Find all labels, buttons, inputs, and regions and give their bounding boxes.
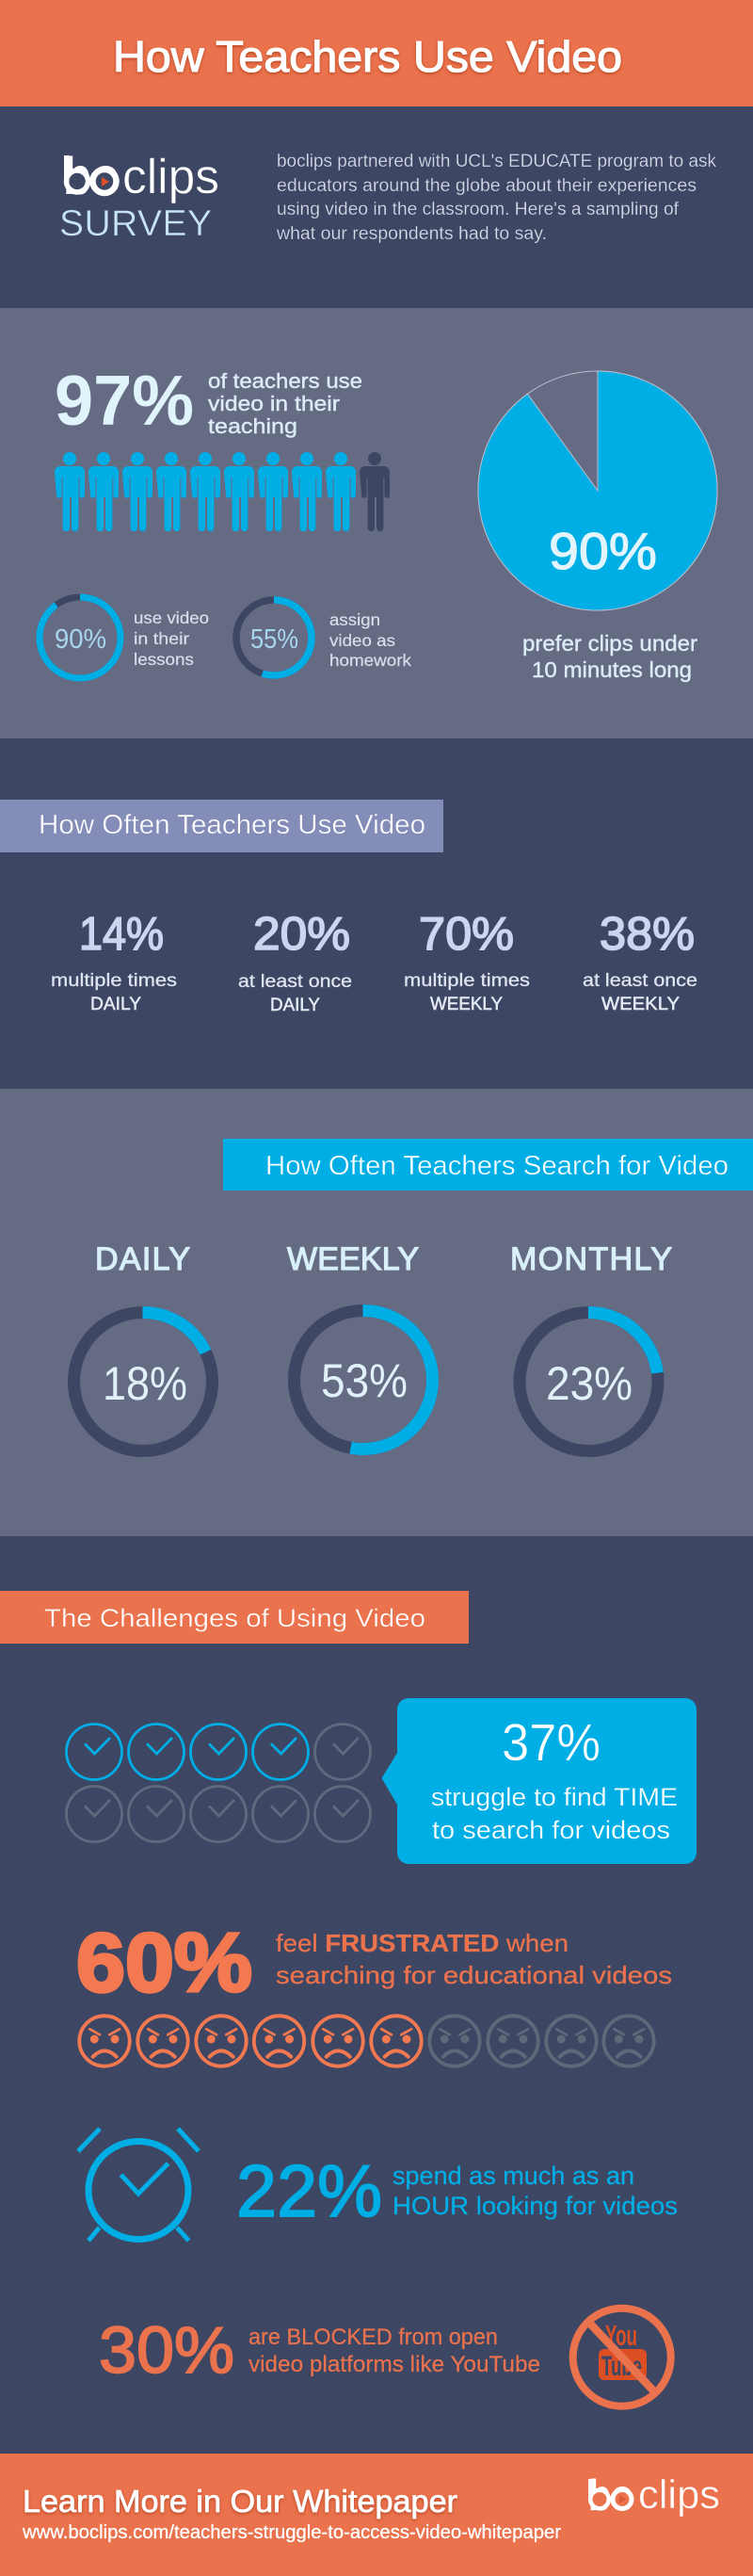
stat: 20 percent at least once daily: 20% <box>253 909 350 960</box>
section banner: How Often Teachers Use Video <box>39 810 425 840</box>
donut: 55 percent assign video: 55% <box>250 624 298 655</box>
stat: 20 percent at least once daily <box>238 909 352 1015</box>
section banner <box>223 1139 753 1191</box>
intro text: educators around the globe about their experiences <box>277 176 697 196</box>
footer url: www.boclips.com/teachers-struggle-to-access-video-whitepaper <box>22 2522 561 2543</box>
stat: 60 percent frustrated <box>76 1916 672 2009</box>
logo: boclips <box>588 2471 720 2519</box>
donut: 55 percent assign video <box>236 600 411 675</box>
stat: 22 percent one hour: spend as much as an <box>393 2162 634 2190</box>
donut: monthly 23 percent <box>510 1241 672 1450</box>
callout: 37 percent: struggle to find TIME <box>431 1783 678 1811</box>
donut: 90 percent use video: lessons <box>134 650 194 669</box>
icon grid: check marks <box>66 1724 371 1842</box>
pie chart: 90 percent prefer short clips: 90% <box>549 522 657 580</box>
stat: 38 percent at least once weekly: at least once <box>583 971 697 991</box>
footer heading: Learn More in Our Whitepaper <box>23 2484 457 2519</box>
logo: boclips survey: SURVEY <box>59 203 212 244</box>
donut: daily 18 percent <box>73 1241 213 1450</box>
stat: 38 percent at least once weekly: WEEKLY <box>601 995 680 1014</box>
donut: weekly 53 percent <box>287 1241 433 1449</box>
donut: 55 percent assign video: homework <box>329 651 411 670</box>
intro text: using video in the classroom. Here's a sampling of <box>277 200 680 219</box>
stat: 97 percent <box>55 361 362 440</box>
logo: boclips survey: clips <box>122 150 219 204</box>
stat: 70 percent multiple times weekly: WEEKLY <box>430 995 503 1014</box>
panel: title header <box>0 0 753 106</box>
donut: daily 18 percent: 18% <box>103 1357 187 1410</box>
section banner: The Challenges of Using Video <box>44 1604 425 1632</box>
donut: weekly 53 percent: WEEKLY <box>287 1241 419 1277</box>
stat: 22 percent one hour: HOUR looking for videos <box>393 2192 678 2220</box>
stat: 60 percent frustrated: feel FRUSTRATED when <box>276 1929 569 1957</box>
intro text: what our respondents had to say. <box>276 224 547 244</box>
donut: 55 percent assign video: video as <box>329 631 395 650</box>
stat: 60 percent frustrated: searching for educational videos <box>276 1961 672 1989</box>
intro text: boclips partnered with UCL's EDUCATE program to ask <box>277 152 716 171</box>
panel: how often teachers search for video <box>0 1089 753 1536</box>
donut: 90 percent use video: use video <box>134 608 209 627</box>
stat: 22 percent one hour: 22% <box>236 2149 382 2232</box>
panel: challenges of using video <box>0 1536 753 2454</box>
pie chart: 90 percent prefer short clips: 10 minutes long <box>532 657 692 682</box>
stat: 97 percent: teaching <box>208 414 297 438</box>
donut: 90 percent use video: in their <box>134 629 189 648</box>
callout: 37 percent: 37% <box>502 1712 601 1772</box>
stat: 20 percent at least once daily: DAILY <box>270 996 320 1015</box>
panel: survey intro <box>0 106 753 308</box>
stat: 14 percent multiple times daily <box>51 909 177 1014</box>
intro text <box>276 152 716 244</box>
callout: 37 percent <box>382 1698 697 1864</box>
icon row: angry faces <box>79 2016 654 2066</box>
donut: monthly 23 percent: MONTHLY <box>510 1241 672 1277</box>
stat: 38 percent at least once weekly <box>583 909 697 1014</box>
stat: 22 percent one hour <box>236 2149 678 2232</box>
stat: 97 percent: video in their <box>208 392 340 415</box>
donut: daily 18 percent: DAILY <box>95 1241 190 1277</box>
stat: 14 percent multiple times daily: multiple times <box>51 971 177 991</box>
stat: 30 percent blocked: are BLOCKED from open <box>248 2325 498 2350</box>
donut: monthly 23 percent: 23% <box>546 1357 633 1410</box>
panel: key statistics <box>0 308 753 738</box>
panel: footer <box>0 2454 753 2576</box>
logo: boclips survey: bo <box>63 146 120 205</box>
stat: 14 percent multiple times daily: 14% <box>79 909 164 960</box>
stat: 70 percent multiple times weekly <box>404 909 530 1014</box>
stat: 14 percent multiple times daily: DAILY <box>90 995 141 1014</box>
pie chart: 90 percent prefer short clips <box>478 371 717 682</box>
donut: 55 percent assign video: assign <box>329 610 380 629</box>
section banner <box>0 1591 469 1644</box>
donut: 90 percent use video: 90% <box>55 624 106 655</box>
icon: blocked YouTube <box>573 2309 671 2406</box>
stat: 70 percent multiple times weekly: 70% <box>419 909 514 960</box>
stat: 60 percent frustrated: 60% <box>76 1916 252 2009</box>
panel: how often teachers use video <box>0 738 753 1089</box>
stat: 97 percent: of teachers use <box>208 369 362 393</box>
title: How Teachers Use Video <box>113 32 622 81</box>
stat: 30 percent blocked <box>99 2313 540 2387</box>
stat: 30 percent blocked: 30% <box>99 2313 234 2387</box>
stat: 38 percent at least once weekly: 38% <box>600 909 695 960</box>
logo: boclips survey <box>59 146 219 244</box>
section banner <box>0 800 443 852</box>
pie chart: 90 percent prefer short clips: prefer clips under <box>522 631 697 656</box>
icon: blocked YouTube: Tube <box>601 2351 642 2382</box>
stat: 20 percent at least once daily: at least once <box>238 972 352 992</box>
logo: boclips: bo <box>588 2471 633 2519</box>
stat: 70 percent multiple times weekly: multiple times <box>404 971 530 991</box>
icon: alarm clock <box>78 2129 199 2241</box>
icon: blocked YouTube: You <box>605 2319 637 2352</box>
stat: 97 percent: 97% <box>55 361 194 440</box>
section banner: How Often Teachers Search for Video <box>265 1151 729 1181</box>
stat: 30 percent blocked: video platforms like YouTube <box>248 2352 540 2377</box>
donut: 90 percent use video <box>40 597 209 678</box>
callout: 37 percent: to search for videos <box>432 1816 670 1844</box>
donut: weekly 53 percent: 53% <box>321 1354 408 1407</box>
logo: boclips: clips <box>638 2472 720 2518</box>
icon row: people <box>55 452 390 531</box>
